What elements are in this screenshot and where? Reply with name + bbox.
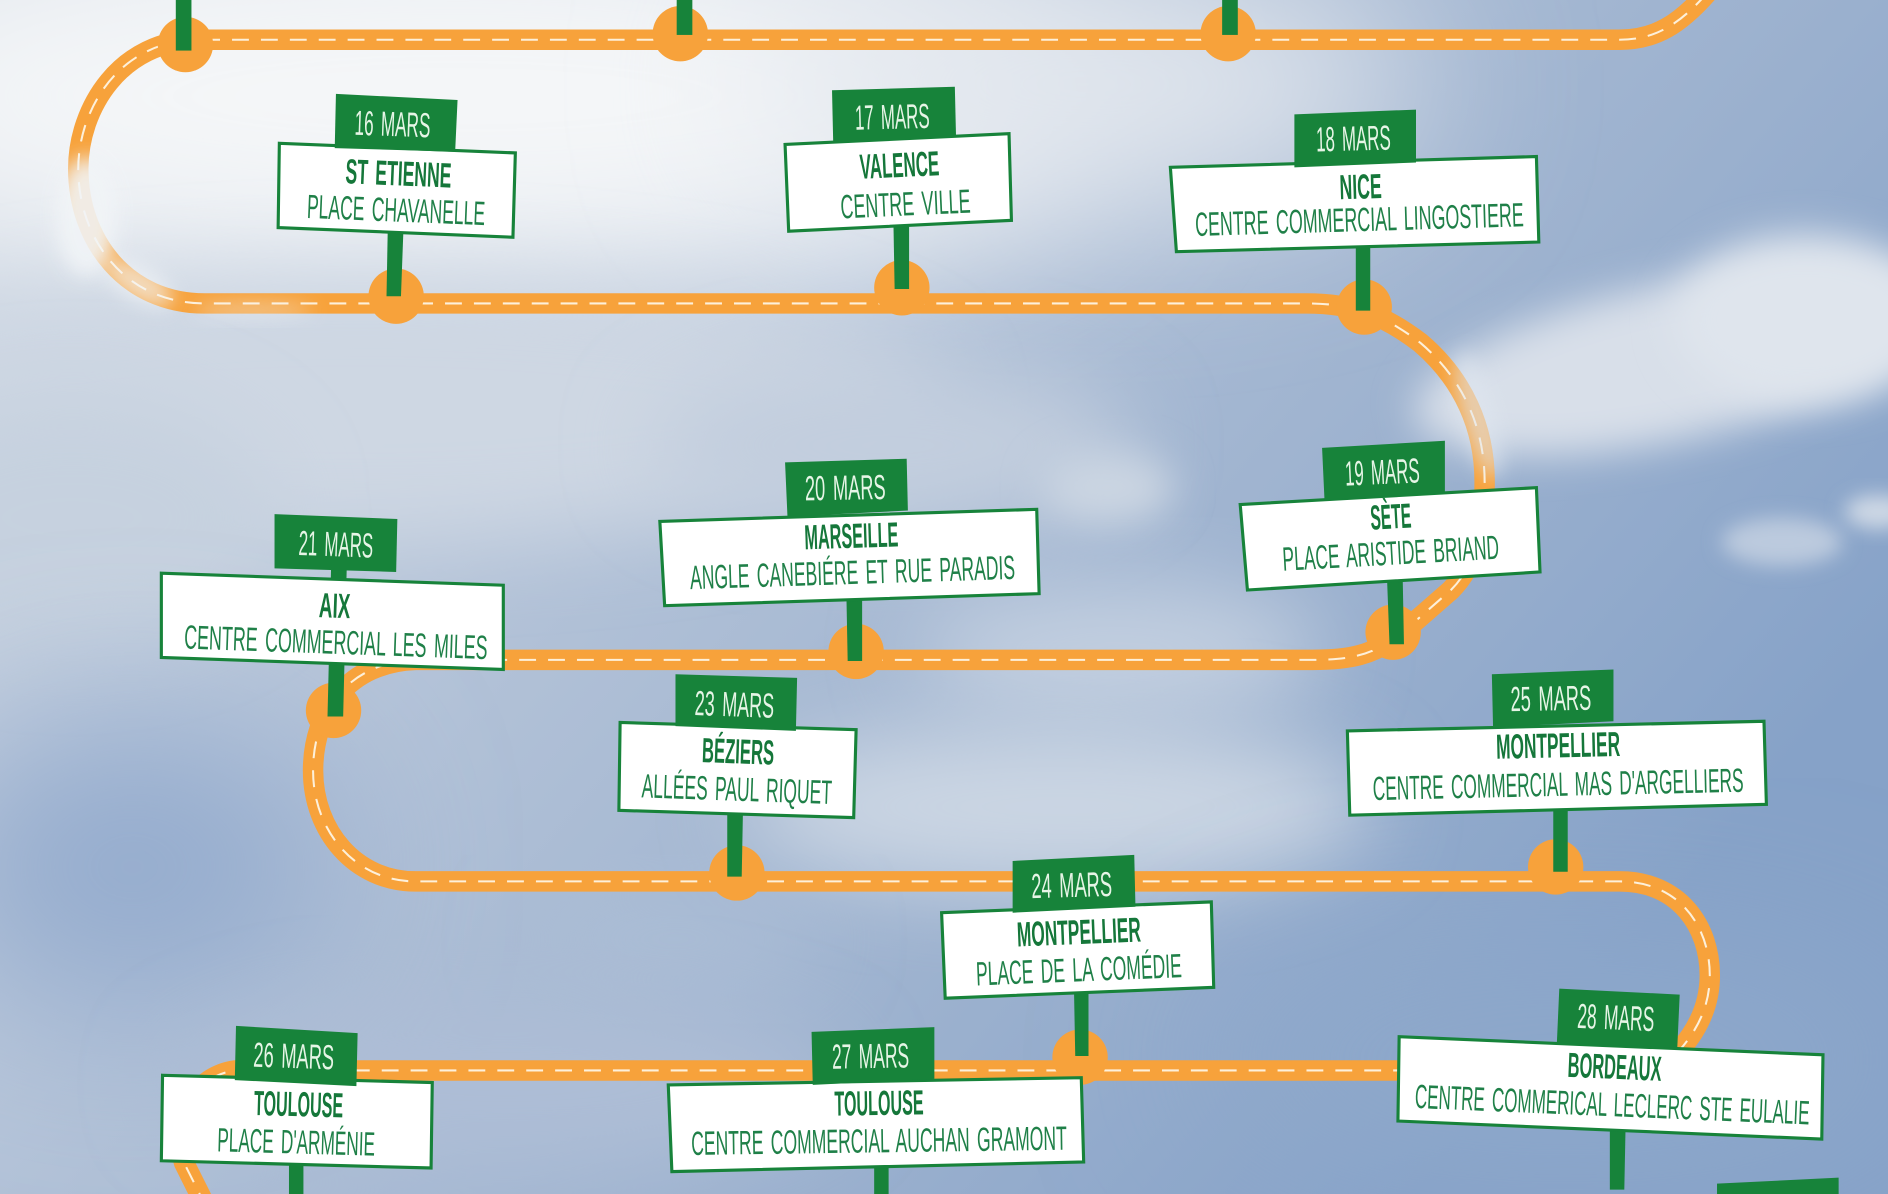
sign: 23 mars: ALLÉES PAUL RIQUET: [641, 767, 833, 812]
sign: 24 mars: MONTPELLIER: [1016, 911, 1142, 954]
sign: 23 mars: [619, 674, 856, 901]
sign: 17 mars: 17 MARS: [854, 97, 930, 138]
sign: 20 mars: [660, 459, 1039, 679]
sign: 20 mars: 20 MARS: [805, 468, 886, 508]
sign: 18 mars: NICE: [1339, 167, 1382, 207]
sign: 16 mars: ST ETIENNE: [345, 152, 452, 196]
sign: 27 mars: 27 MARS: [832, 1036, 909, 1077]
sign: 18 mars: CENTRE COMMERCIAL LINGOSTIERE: [1195, 196, 1524, 244]
stop marker: top left: [158, 0, 213, 72]
sign: 26 mars: PLACE D'ARMÉNIE: [217, 1121, 376, 1164]
sign: 24 mars: [942, 855, 1214, 1085]
sign: 19 mars: [1240, 441, 1540, 660]
sign: 18 mars: 18 MARS: [1316, 119, 1391, 159]
sign: 26 mars: [161, 1026, 432, 1194]
sign: 27 mars: [668, 1027, 1084, 1194]
sign: 21 mars: CENTRE COMMERCIAL LES MILES: [184, 619, 488, 667]
sign: 24 mars: PLACE DE LA COMÉDIE: [975, 947, 1183, 993]
sign: 21 mars: 21 MARS: [298, 524, 374, 566]
sign: 28 mars: 28 MARS: [1577, 997, 1655, 1039]
sign: 24 mars: 24 MARS: [1031, 865, 1112, 906]
sign: 27 mars: CENTRE COMMERCIAL AUCHAN GRAMONT: [691, 1120, 1067, 1163]
sign: 19 mars: SÈTE: [1369, 495, 1412, 538]
sign: 25 mars: [1347, 669, 1766, 895]
sign: 16 mars: [278, 94, 515, 324]
sign: 23 mars: BÉZIERS: [701, 730, 775, 773]
sign: 26 mars: TOULOUSE: [254, 1084, 344, 1125]
sign: 27 mars: TOULOUSE: [834, 1083, 924, 1124]
sign: 26 mars: 26 MARS: [253, 1036, 335, 1077]
sign: 16 mars: PLACE CHAVANELLE: [306, 188, 486, 233]
sign: 17 mars: VALENCE: [859, 144, 940, 187]
sign: 28 mars: BORDEAUX: [1567, 1046, 1662, 1089]
sign: 17 mars: CENTRE VILLE: [840, 183, 971, 226]
sign: 19 mars: PLACE ARISTIDE BRIAND: [1282, 529, 1500, 579]
sign: 23 mars: 23 MARS: [694, 684, 775, 726]
sign: 19 mars: 19 MARS: [1344, 451, 1420, 494]
stop marker: top right: [1200, 0, 1256, 61]
stop marker: top centre: [653, 0, 708, 61]
sign: 17 mars: [785, 87, 1011, 315]
sign: 18 mars: [1170, 110, 1539, 335]
sign: 25 mars: 25 MARS: [1510, 679, 1592, 719]
sign: 21 mars: [161, 514, 503, 738]
sign: 28 mars: [1398, 989, 1823, 1190]
sign: 20 mars: MARSEILLE: [804, 515, 899, 557]
cloud haze fading the road: [55, 157, 1512, 484]
sign: 25 mars: MONTPELLIER: [1496, 725, 1621, 767]
sign: 20 mars: ANGLE CANEBIÉRE ET RUE PARADIS: [689, 549, 1016, 597]
sign: 21 mars: AIX: [318, 586, 351, 626]
sign: next date tag, cut off at bottom edge: [1717, 1178, 1839, 1194]
sign: 16 mars: 16 MARS: [354, 104, 431, 145]
